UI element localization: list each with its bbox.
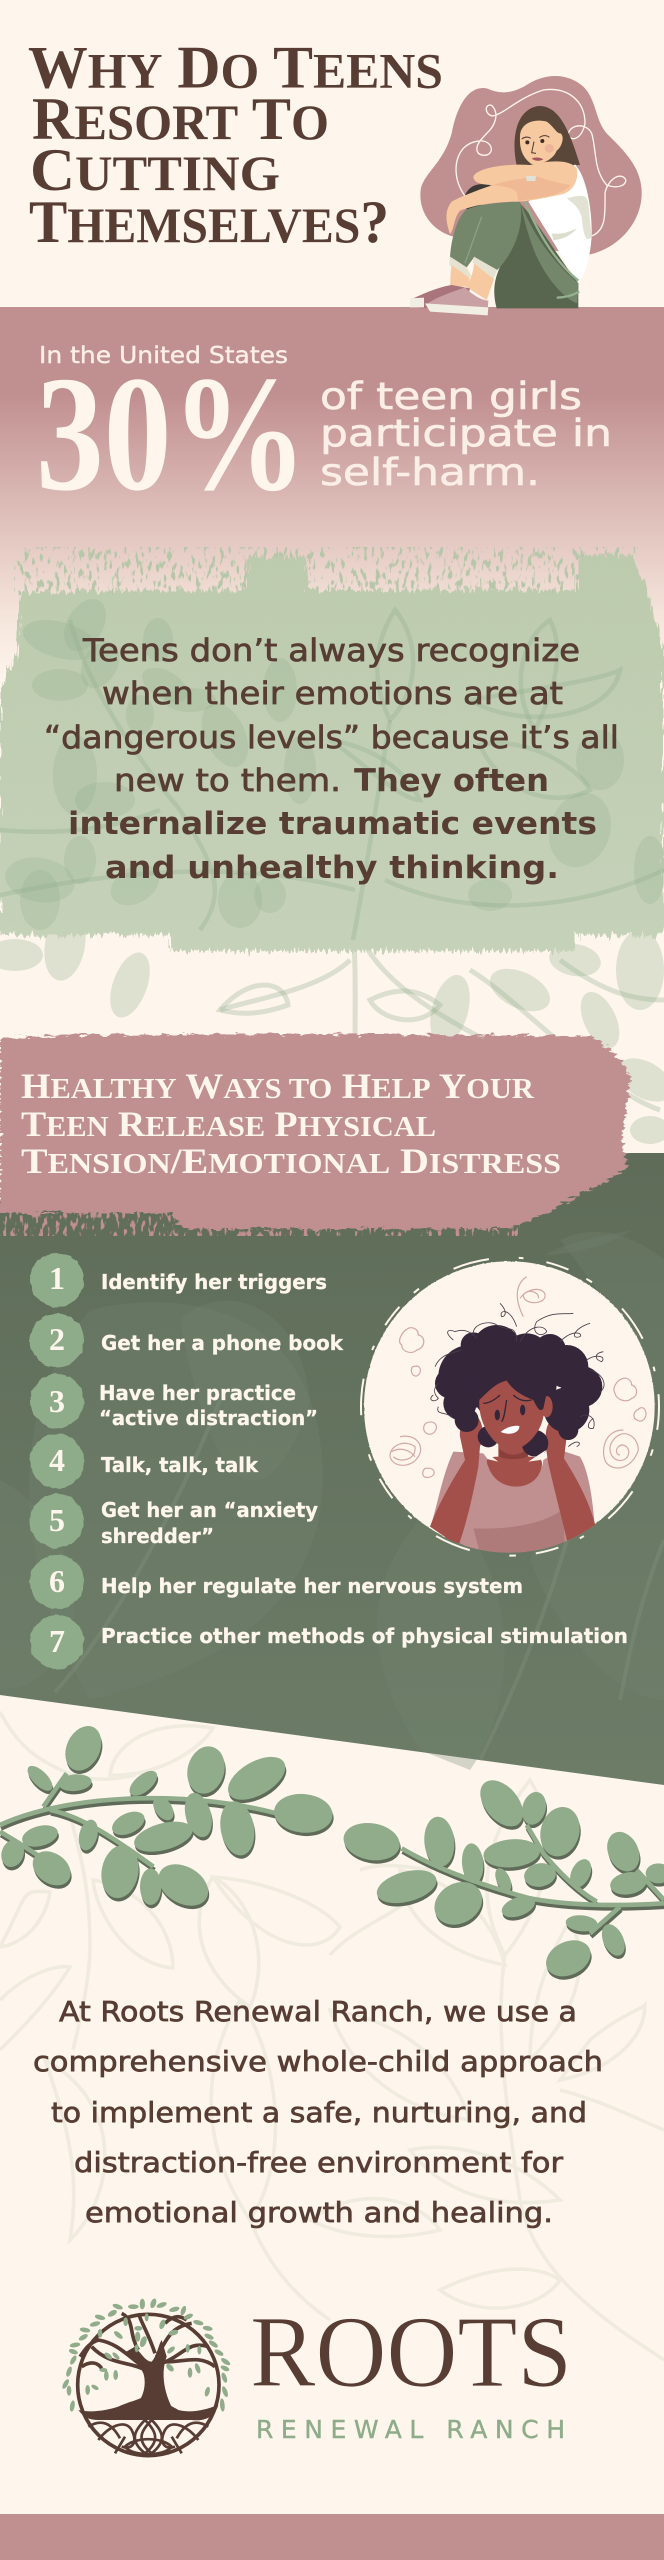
badge numbers: 3 xyxy=(49,1383,65,1419)
panel leaf pattern xyxy=(2,592,664,930)
mouth xyxy=(501,1426,519,1434)
heading text xyxy=(21,1066,561,1181)
frayed top edge specks xyxy=(14,547,639,595)
title: THEMSELVES? xyxy=(29,189,389,255)
fringe xyxy=(479,1375,547,1410)
list item text: Practice other methods of physical stimulation xyxy=(101,1624,628,1648)
closing paragraph xyxy=(33,1995,603,2229)
panel text: when their emotions are at xyxy=(102,676,563,712)
statistic description xyxy=(320,375,612,494)
arms and hands xyxy=(430,1416,483,1546)
sneakers xyxy=(410,285,470,308)
badge numbers: 6 xyxy=(49,1563,65,1599)
closing paragraph: to implement a safe, nurturing, and xyxy=(51,2096,587,2129)
panel: pink brush heading xyxy=(0,1034,631,1236)
collar highlights xyxy=(481,1448,546,1462)
brush stroke body xyxy=(0,555,664,951)
near trouser leg xyxy=(450,202,521,270)
dark trouser leg xyxy=(494,203,578,308)
leaves xyxy=(61,2298,231,2412)
cream-area translucent leaves xyxy=(0,906,664,1144)
footer bar xyxy=(0,2514,664,2560)
closing paragraph: distraction-free environment for xyxy=(74,2146,564,2179)
badge numbers: 1 xyxy=(49,1260,65,1296)
curly hair xyxy=(435,1325,602,1457)
badge numbers: 4 xyxy=(49,1442,65,1478)
heading text: TEEN RELEASE PHYSICAL xyxy=(21,1104,436,1144)
panel text: “dangerous levels” because it’s all xyxy=(44,720,619,756)
badge numbers: 2 xyxy=(49,1321,65,1357)
pink scribbles xyxy=(390,1277,646,1477)
list item text: Get her a phone book xyxy=(101,1331,344,1355)
statistic: in the United States: In the United States xyxy=(39,343,288,369)
shirt xyxy=(430,1416,597,1553)
hair back xyxy=(514,106,580,166)
panel: dark green section xyxy=(0,1153,664,1785)
root mass xyxy=(78,2390,218,2420)
title xyxy=(28,34,443,255)
list item text xyxy=(99,1270,628,1648)
statistic description: of teen girls xyxy=(320,375,582,418)
logo tagline: RENEWAL RANCH xyxy=(256,2415,565,2444)
branch leaves xyxy=(0,1720,334,1914)
facial features xyxy=(483,1395,532,1422)
branch shadow xyxy=(0,1723,335,1918)
faint cream leaf pattern, lower section xyxy=(0,1712,664,2360)
white curly line xyxy=(456,89,626,236)
face xyxy=(520,121,563,164)
panel: green brush stroke with message xyxy=(0,547,664,951)
face xyxy=(479,1380,544,1450)
list item text: Help her regulate her nervous system xyxy=(101,1574,523,1598)
dark far knee xyxy=(465,184,497,210)
statistic description: participate in xyxy=(320,412,612,455)
branches xyxy=(80,2313,215,2370)
title: WHY DO TEENS xyxy=(28,34,443,100)
list item text: shredder” xyxy=(101,1524,214,1548)
closing paragraph: At Roots Renewal Ranch, we use a xyxy=(59,1995,577,2028)
list item text: Talk, talk, talk xyxy=(101,1453,259,1477)
list item text: Identify her triggers xyxy=(101,1270,327,1294)
panel text xyxy=(44,633,619,886)
panel text: Teens don’t always recognize xyxy=(82,633,580,669)
panel leaf outlines xyxy=(0,610,664,940)
frayed lower edge specks xyxy=(0,1212,520,1236)
title: CUTTING xyxy=(30,137,280,203)
closing paragraph: emotional growth and healing. xyxy=(85,2196,553,2229)
pink statistic band background xyxy=(0,307,664,680)
badge numbers xyxy=(49,1260,65,1659)
knotted roots xyxy=(88,2420,208,2454)
list item text: Have her practice xyxy=(99,1381,296,1405)
panel text: They often xyxy=(354,763,549,799)
illustration: sad girl hugging knees xyxy=(410,76,642,315)
logo wordmark: ROOTS xyxy=(250,2296,572,2409)
light stems in dark panel xyxy=(55,1400,664,1760)
ear xyxy=(541,1396,553,1417)
closing paragraph: comprehensive whole-child approach xyxy=(33,2045,603,2078)
heading text: TENSION /EMOTIONAL DISTRESS xyxy=(21,1141,561,1181)
shins xyxy=(450,263,494,300)
badge numbers: 5 xyxy=(49,1502,65,1538)
leafy branch, right xyxy=(341,1772,664,1987)
numbered list of healthy ways xyxy=(30,1253,628,1669)
trouser cuffs xyxy=(449,257,497,279)
trunk xyxy=(123,2340,175,2413)
number badges xyxy=(30,1253,84,1669)
logo: tree of life xyxy=(61,2298,231,2456)
leafy branch, left xyxy=(0,1720,335,1918)
title: RESORT TO xyxy=(32,86,329,152)
shirt xyxy=(528,164,592,283)
stray hair strands xyxy=(431,1303,604,1447)
heading text: HEALTHY WAYS TO HELP YOUR xyxy=(21,1066,535,1106)
branch shadow xyxy=(342,1776,664,1987)
statistic: in the United States xyxy=(36,342,612,525)
statistic description: self-harm. xyxy=(320,451,540,494)
arms xyxy=(446,161,577,234)
cream circle xyxy=(364,1261,655,1552)
branch leaves xyxy=(341,1772,664,1983)
branch stems xyxy=(0,1773,277,1867)
panel text: internalize traumatic events xyxy=(68,806,597,842)
facial features xyxy=(522,136,549,153)
badge numbers: 7 xyxy=(49,1623,65,1659)
list item text: Get her an “anxiety xyxy=(101,1498,318,1522)
ring xyxy=(78,2314,219,2456)
big number 30%: 30% xyxy=(36,342,307,525)
large leaf shapes in dark panel xyxy=(0,1230,664,1770)
pink blob behind girl xyxy=(420,76,642,255)
brush ring xyxy=(361,1258,659,1556)
branch stems xyxy=(402,1825,664,1933)
faint cream-area leaf sprigs around mid section xyxy=(150,930,664,1110)
panel text: new to them. xyxy=(114,763,341,799)
illustration: anxious woman in circle xyxy=(361,1258,659,1556)
panel text: and unhealthy thinking. xyxy=(105,850,559,886)
list item text: “active distraction” xyxy=(99,1406,318,1430)
